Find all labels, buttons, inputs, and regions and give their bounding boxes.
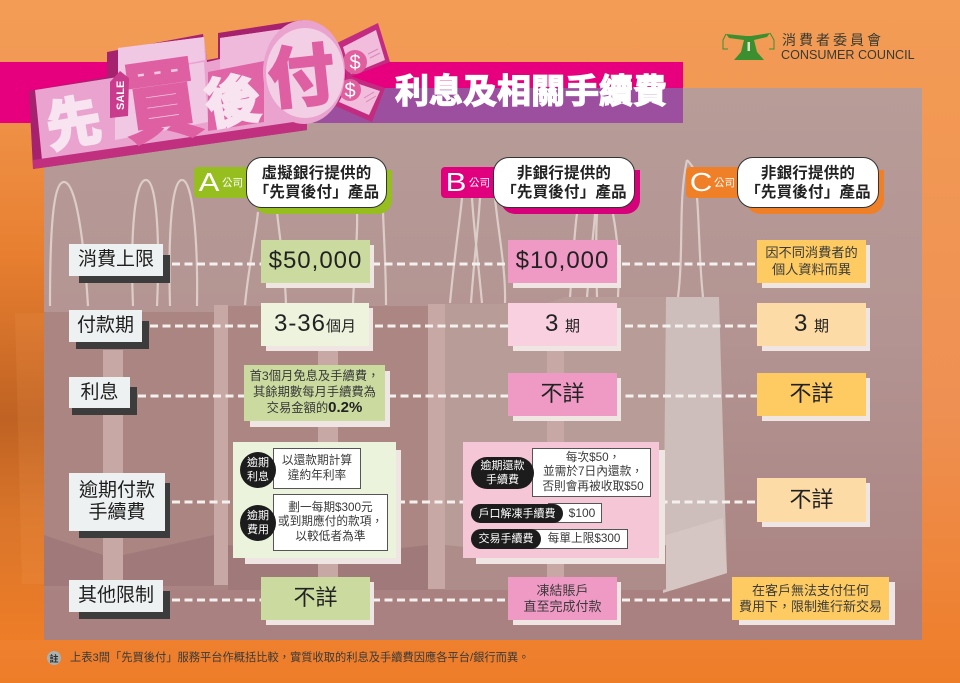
late charge badge: 逾期: [247, 510, 269, 522]
late charge badge: [240, 505, 276, 541]
logo text: [781, 32, 915, 62]
company B: other limits: 直至完成付款: [523, 598, 602, 614]
unfreeze fee badge: [471, 504, 563, 523]
company C: credit limit: [757, 240, 870, 288]
company tab B: [441, 167, 499, 198]
company B: interest: [508, 373, 621, 421]
icon: SALE tag: SALE: [115, 81, 127, 110]
icon: banknotes: [333, 23, 390, 122]
transaction fee value: 每單上限$300: [548, 532, 620, 545]
late charge badge: 費用: [247, 524, 269, 536]
title sign: 先買後付: 付: [265, 37, 338, 117]
company B: other limits: 凍結賬戶: [536, 582, 588, 598]
bubble C: 「先買後付」產品: [745, 184, 871, 200]
icon: banknotes: $: [344, 80, 356, 102]
late charge text: 以較低者為準: [295, 530, 366, 543]
transaction fee badge: 交易手續費: [478, 533, 534, 545]
company A: other limits: [261, 577, 374, 625]
late repayment fee badge: 手續費: [486, 474, 519, 486]
company A: other limits: 不詳: [293, 585, 338, 610]
row label: 利息: 利息: [80, 382, 118, 402]
icon: note badge: 註: [49, 654, 58, 664]
transaction fee badge: [471, 529, 541, 549]
bubble A: 虛擬銀行提供的: [262, 164, 371, 182]
company C: other limits: [732, 577, 895, 625]
company B: other limits: [508, 577, 621, 625]
title sign: 先買後付: 買: [118, 50, 206, 156]
icon: scales: [722, 32, 774, 60]
icon: banknotes: $: [349, 52, 361, 74]
company tab A: A: [199, 167, 219, 197]
logo text: 消費者委員會: [782, 32, 884, 48]
row label: 消費上限: [69, 244, 170, 283]
company A: interest: 其餘期數每月手續費為: [253, 385, 376, 399]
late charge text: 或到期應付的款項，: [278, 515, 383, 528]
company C: other limits: 在客戶無法支付任何: [752, 582, 869, 598]
row label: 利息: [69, 377, 137, 415]
company A: repayment period: [261, 303, 373, 351]
company A: credit limit: $50,000: [269, 247, 362, 274]
late repayment fee text: 並需於7日內還款，: [543, 465, 643, 478]
note text: 上表3間「先買後付」服務平台作概括比較，實質收取的利息及手續費因應各平台/銀行而異。: [70, 652, 529, 664]
late repayment fee text: [532, 448, 651, 497]
company C: credit limit: 因不同消費者的: [765, 245, 858, 260]
company C: late fees: 不詳: [789, 487, 834, 512]
company tab A: 公司: [222, 177, 243, 189]
late charge text: [273, 494, 388, 551]
row label: 付款期: [69, 310, 149, 349]
icon: SALE tag: [110, 71, 129, 118]
company B: repayment period: 3 期: [545, 310, 580, 337]
row label: 逾期付款手續費: [69, 473, 170, 538]
company B: interest: 不詳: [540, 381, 584, 406]
row label: 其他限制: [69, 580, 170, 619]
late interest text: 違約年利率: [288, 468, 346, 482]
logo: Consumer Council: [722, 32, 915, 62]
late interest badge: 逾期: [247, 457, 269, 469]
bubble B: [493, 157, 635, 208]
bubble A: 「先買後付」產品: [254, 184, 379, 200]
company tab B: B: [446, 167, 466, 197]
footnote: [47, 651, 529, 665]
company C: credit limit: 個人資料而異: [772, 262, 851, 276]
title: 利息及相關手續費: 利息及相關手續費: [395, 73, 667, 111]
title sign: 先買後付: [29, 20, 390, 169]
company C: interest: [757, 373, 870, 421]
company C: other limits: 費用下，限制進行新交易: [739, 598, 882, 614]
late repayment fee badge: 逾期還款: [480, 460, 524, 472]
company A: interest: 首3個月免息及手續費，: [250, 369, 379, 383]
company B: repayment period: [508, 303, 621, 351]
late charge text: 劃一每期$300元: [288, 501, 373, 514]
company B: credit limit: $10,000: [516, 247, 609, 274]
late interest badge: [240, 452, 276, 488]
banner: magenta and purple strip: [0, 62, 683, 123]
late repayment fee text: 每次$50，: [566, 451, 620, 464]
unfreeze fee value: [548, 503, 602, 523]
bubble B: 非銀行提供的: [517, 164, 611, 182]
row label: 逾期付款手續費: 手續費: [88, 502, 146, 523]
bubble B: 「先買後付」產品: [501, 184, 627, 200]
company B: credit limit: [508, 240, 621, 288]
bubble C: [737, 157, 879, 208]
company tab C: C: [690, 167, 712, 197]
icon: note badge: [47, 651, 61, 665]
transaction fee value: [528, 529, 628, 549]
company A: credit limit: [261, 240, 374, 288]
late repayment fee text: 否則會再被收取$50: [542, 480, 644, 493]
company A: repayment period: 3-36個月: [274, 310, 356, 337]
company tab C: 公司: [714, 177, 735, 189]
row label: 消費上限: 消費上限: [78, 249, 154, 270]
header: company C: [686, 157, 884, 214]
company tab A: [194, 167, 252, 198]
late interest text: [273, 448, 361, 489]
company C: repayment period: 3 期: [794, 310, 829, 337]
company tab B: 公司: [469, 177, 490, 189]
company A: interest: 交易金額的0.2%: [267, 399, 362, 416]
late interest text: 以還款期計算: [282, 454, 352, 467]
logo text: CONSUMER COUNCIL: [781, 48, 915, 62]
company C: repayment period: [757, 303, 870, 351]
unfreeze fee value: $100: [569, 506, 595, 520]
company A: interest: [244, 365, 390, 427]
row label: 付款期: 付款期: [77, 315, 134, 336]
row label: 其他限制: 其他限制: [78, 585, 154, 606]
header: company B: [441, 157, 640, 214]
late interest badge: 利息: [247, 471, 269, 483]
bubble A: [246, 157, 387, 208]
company A: late fees panel: [233, 442, 401, 564]
late repayment fee badge: [471, 457, 534, 489]
bubble C: 非銀行提供的: [761, 164, 855, 182]
company C: late fees: [757, 478, 870, 527]
header: company A: [194, 157, 392, 214]
company tab C: [686, 167, 744, 198]
title sign: 先買後付: 後: [201, 68, 265, 137]
company C: interest: 不詳: [789, 381, 834, 406]
row label: 逾期付款手續費: 逾期付款: [79, 480, 155, 501]
unfreeze fee badge: 戶口解凍手續費: [478, 508, 556, 520]
title sign: 先買後付: 先: [42, 90, 106, 159]
company B: late fees panel: [463, 442, 665, 564]
